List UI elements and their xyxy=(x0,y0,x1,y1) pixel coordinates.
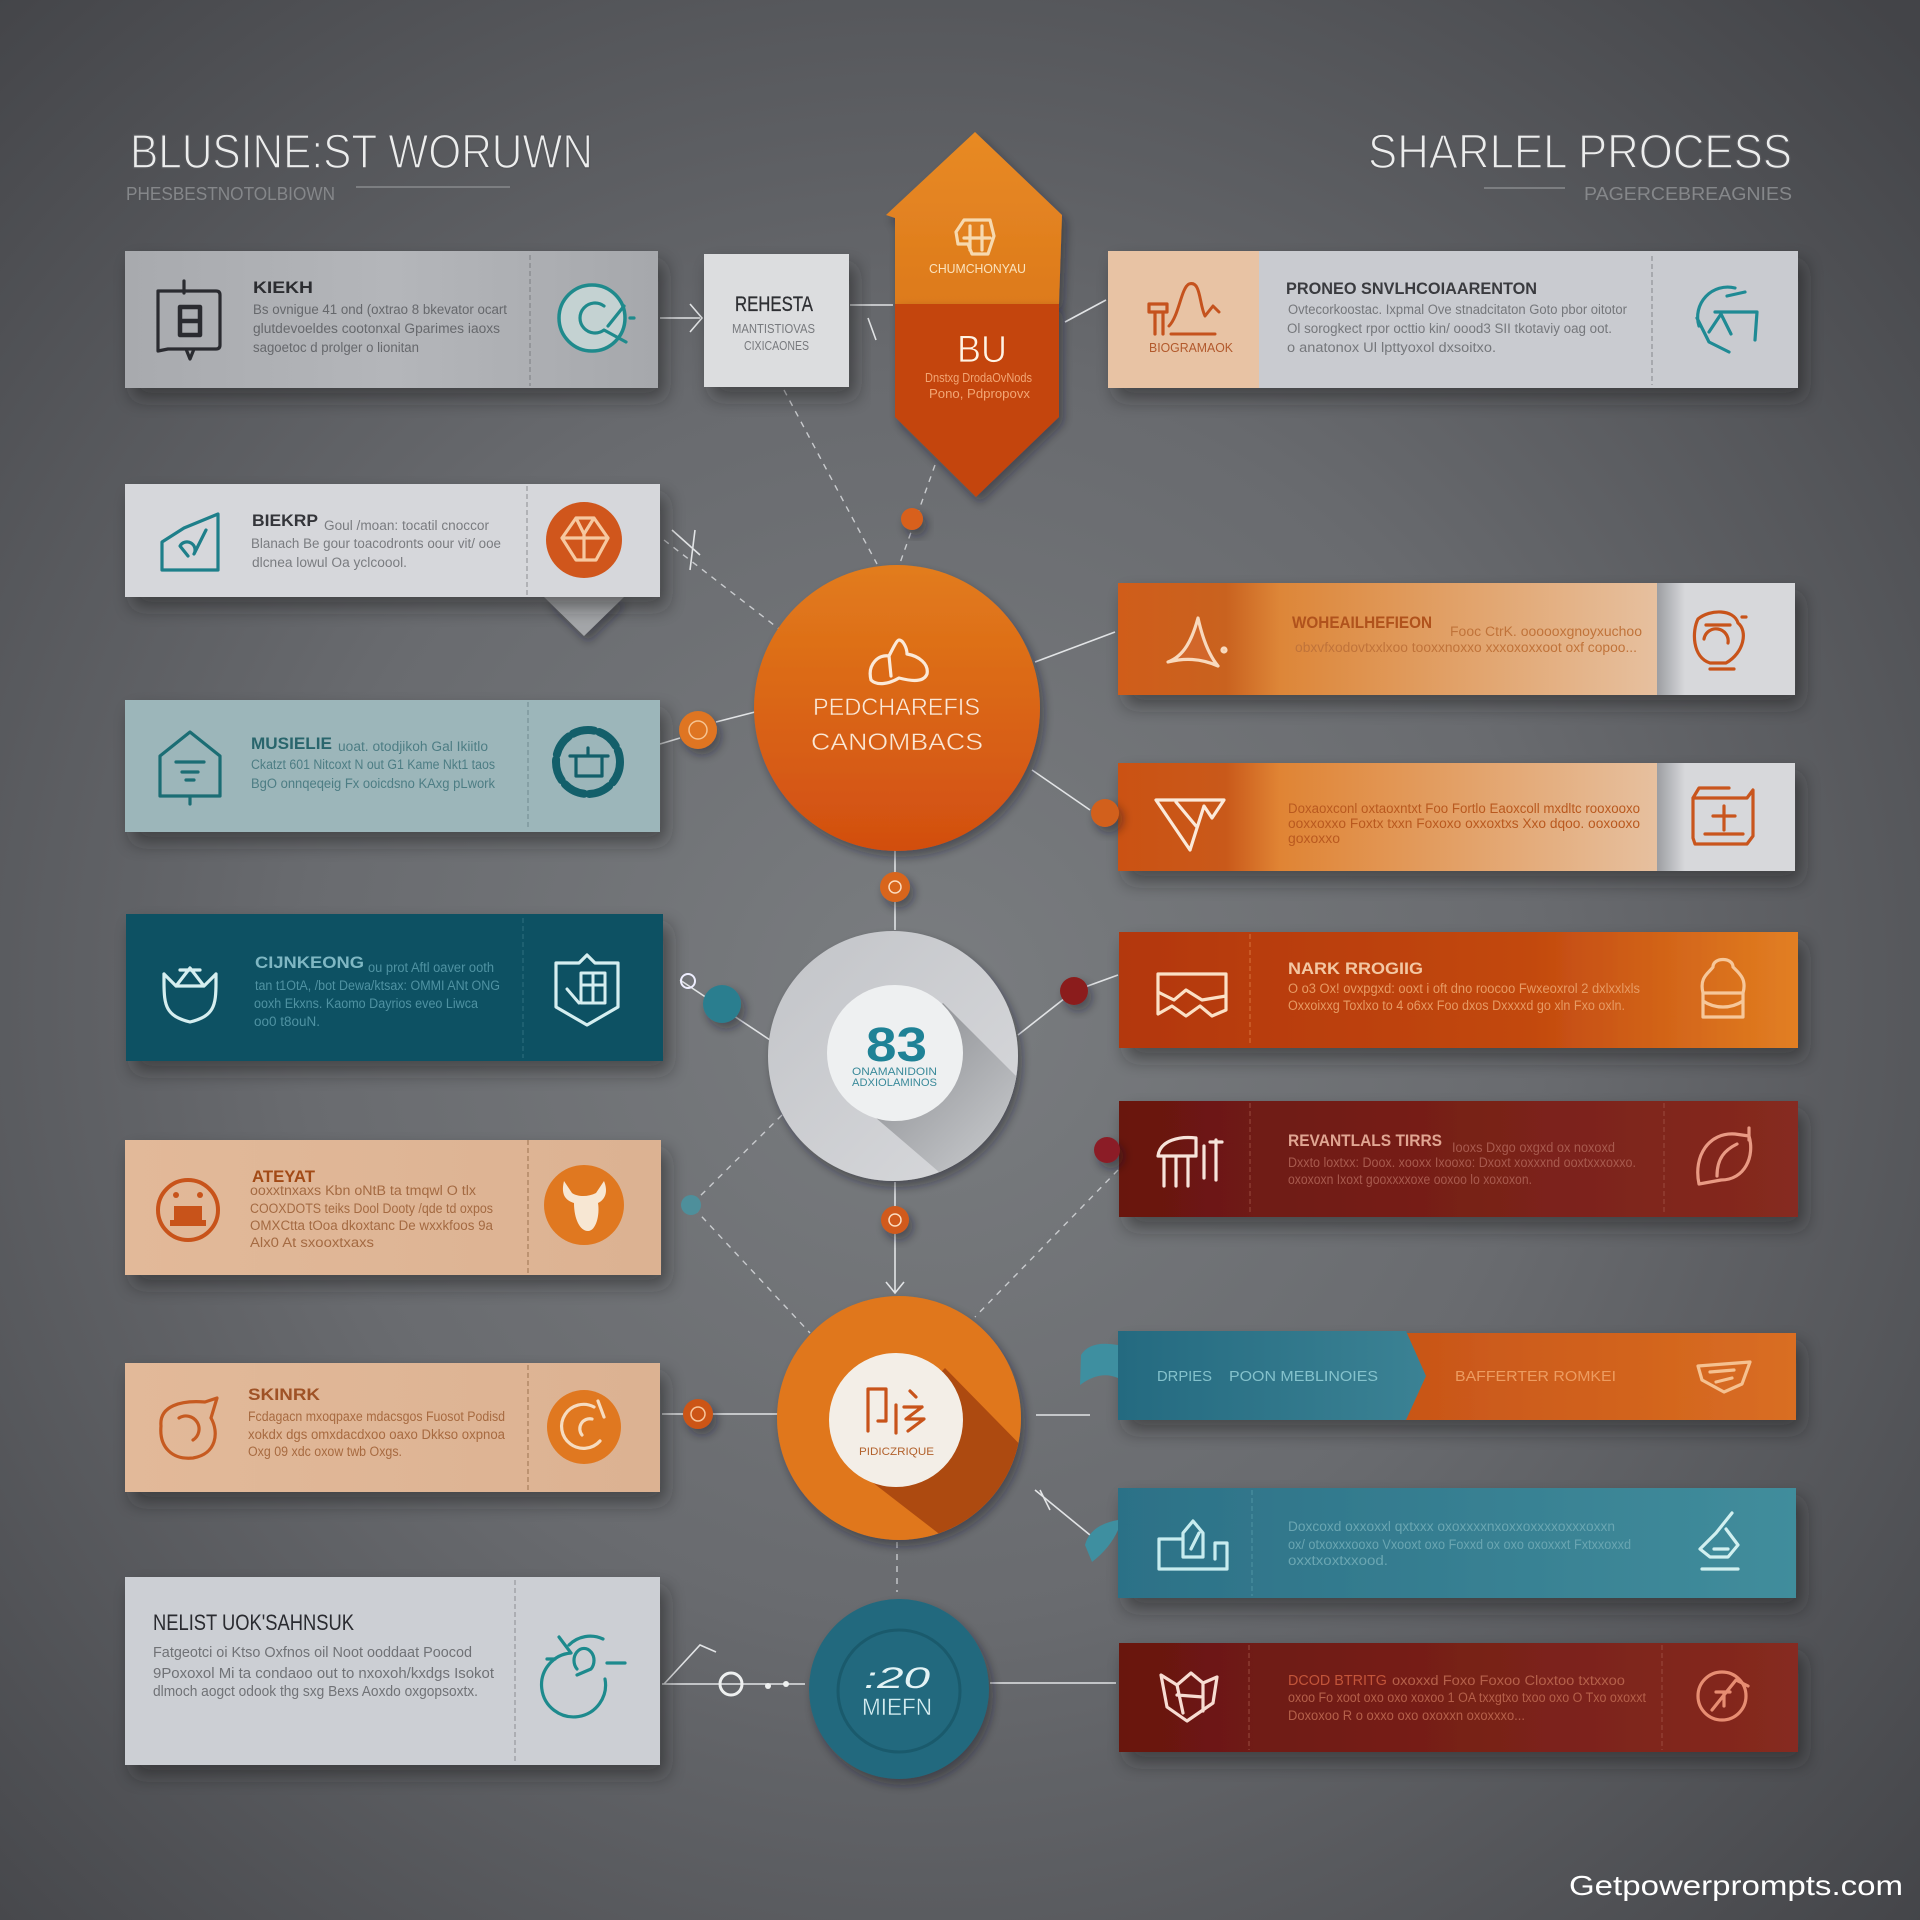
arrow-shaped central banner xyxy=(886,132,1062,497)
panel: right card 8: oxoxxd Foxo Foxoo Cloxtoo txtxxoo xyxy=(1392,1673,1625,1688)
icon: orange disc with crescent xyxy=(547,1390,621,1464)
icon: badge glyph xyxy=(868,1389,924,1433)
title: left xyxy=(126,126,593,204)
icon: orange figure xyxy=(1694,612,1746,669)
panel: left card 7: Fatgeotci oi Ktso Oxfnos oil Noot ooddaat Poocod xyxy=(153,1645,472,1661)
panel: left card 2: Goul /moan: tocatil cnoccor xyxy=(324,518,490,533)
icon: circle glyph xyxy=(870,640,927,684)
icon: orange line mountain xyxy=(1149,284,1219,334)
title: right: PAGERCEBREAGNIES xyxy=(1584,184,1792,204)
panel: left card 4: ooxh Ekxns. Kaomo Dayrios eveo Liwca xyxy=(254,996,478,1011)
panel: right card 5 xyxy=(1119,1101,1798,1217)
central node: teal circle xyxy=(809,1599,989,1779)
panel: left card 2: dlcnea lowul Oa yclcoool. xyxy=(252,555,407,570)
panel: right card 2: obxvfxodovtxxlxoo tooxxnoxxo xxxoxoxxoot oxf copoo... xyxy=(1295,640,1637,655)
icon: teal swirl xyxy=(1697,287,1757,352)
panel: left card 2: BIEKRP xyxy=(252,511,318,530)
panel: right card 4: NARK RROGIIG xyxy=(1288,959,1423,978)
panel: right card 3: Doxaoxconl oxtaoxntxt Foo Fortlo Eaoxcoll mxdltc rooxooxo xyxy=(1288,801,1640,816)
panel: small white box xyxy=(704,254,849,387)
panel: left card 1 xyxy=(125,251,658,388)
icon: bag outline xyxy=(1702,960,1744,1017)
panel: left card 7 xyxy=(125,1577,660,1765)
panel: left card 4: ou prot Aftl oaver ooth xyxy=(368,960,494,975)
panel: right card 8: DCOD BTRITG xyxy=(1288,1672,1387,1689)
panel: left card 1: glutdevoeldes cootonxal Gparimes iaoxs xyxy=(253,321,500,336)
central node: orange circle with title: CANOMBACS xyxy=(811,729,983,756)
arrow-shaped central banner: Dnstxg DrodaOvNods xyxy=(925,371,1032,385)
panel: left card 5: COOXDOTS teiks Dool Dooty /qde td oxpos xyxy=(250,1201,493,1216)
panel: small white box: CIXICAONES xyxy=(744,338,809,353)
panel: left card 4 xyxy=(126,914,663,1061)
panel: left card 3 xyxy=(125,700,660,832)
icon: teal gear and pot xyxy=(556,730,620,794)
central node: grey circle with 83: 83 xyxy=(866,1019,927,1072)
watermark: Getpowerprompts.com xyxy=(1569,1870,1903,1901)
panel: right card 5: Iooxs Dxgo oxgxd ox noxoxd xyxy=(1452,1140,1615,1155)
central node: orange circle with badge: PIDICZRIQUE xyxy=(859,1446,934,1458)
icon: orange disc with bull xyxy=(544,1165,624,1245)
panel: left card 1: Bs ovnigue 41 ond (oxtrao 8 bkevator ocart xyxy=(253,302,507,317)
icon: orange face ring xyxy=(158,1180,218,1240)
central node: orange circle with title: PEDCHAREFIS xyxy=(813,694,980,721)
arrow-shaped central banner: Pono, Pdpropovx xyxy=(929,387,1031,401)
panel: right card 5: REVANTLALS TIRRS xyxy=(1288,1131,1442,1150)
panel: right card 8 xyxy=(1119,1643,1798,1752)
panel: left card 1: sagoetoc d prolger o lionitan xyxy=(253,340,419,355)
icon: building outline xyxy=(1159,1521,1227,1569)
panel: right card 6: BAFFERTER ROMKEI xyxy=(1455,1368,1616,1385)
panel: left card 6: Oxg 09 xdc oxow twb Oxgs. xyxy=(248,1444,402,1459)
panel: right card 4: O o3 Ox! ovxpgxd: ooxt i oft dno roocoo Fwxeoxrol 2 dxlxxlxls xyxy=(1288,981,1640,996)
icon: orange calendar card xyxy=(1693,788,1753,844)
panel: right card 3 xyxy=(1118,763,1795,871)
panel: right card 1 xyxy=(1108,251,1798,388)
title: left: BLUSINE:ST WORUWN xyxy=(130,126,593,179)
panel: left card 2: Blanach Be gour toacodronts oour vit/ ooe xyxy=(251,536,501,551)
icon: line triangle xyxy=(1168,618,1226,666)
panel: left card 6: Fcdagacn mxoqpaxe mdacsgos Fuosot Podisd xyxy=(248,1409,505,1424)
panel: right card 3: goxoxxo xyxy=(1288,831,1340,846)
central node: grey circle with 83 xyxy=(768,931,1040,1190)
central node: orange circle with badge xyxy=(777,1296,1040,1550)
panel: right card 6: DRPIES xyxy=(1157,1368,1212,1385)
panel: right card 7: ox/ otxoxxxooxo Vxooxt oxo Foxxd ox oxo oxoxxxt Fxtxxoxxd xyxy=(1288,1537,1631,1552)
panel: right card 8: oxoo Fo xoot oxo oxo xoxoo 1 OA txxgtxo txoo oxo O Txo oxoxxt xyxy=(1288,1690,1646,1705)
central node: teal circle: :20 xyxy=(864,1662,930,1695)
panel: right card 2 xyxy=(1118,583,1795,695)
icon: white shield xyxy=(556,955,618,1025)
central node: grey circle with 83: ADXIOLAMINOS xyxy=(852,1077,937,1089)
panel: left card 4: oo0 t8ouN. xyxy=(254,1014,320,1029)
panel: right card 3: ooxxoxxo Foxtx txxn Foxoxo oxxoxtxs Xxo dqoo. ooxooxo xyxy=(1288,816,1640,831)
central node: teal circle: MIEFN xyxy=(862,1694,932,1721)
icon: banner glyph xyxy=(956,220,994,254)
icon: ribbon xyxy=(1698,1362,1750,1392)
panel: right card 8: Doxoxoo R o oxxo oxo oxoxxn oxoxxxo... xyxy=(1288,1708,1525,1723)
panel: left card 3: MUSIELIE xyxy=(251,734,332,753)
arrow-shaped central banner: BU xyxy=(957,329,1007,371)
panel: left card 2 xyxy=(125,484,660,636)
panel: left card 7: 9Poxoxol Mi ta condaoo out to nxoxoh/kxdgs Isokot xyxy=(153,1666,494,1682)
panel: right card 1: PRONEO SNVLHCOIAARENTON xyxy=(1286,279,1537,298)
icon: teal target xyxy=(559,285,634,351)
panel: left card 4: tan t1OtA, /bot Dewa/ktsax: OMMI ANt ONG xyxy=(255,978,500,993)
panel: left card 6: SKINRK xyxy=(248,1385,321,1404)
panel: left card 7: NELIST UOK'SAHNSUK xyxy=(153,1610,354,1635)
connector lines between nodes and cards xyxy=(660,300,1118,1684)
panel: right card 2: Fooc CtrK. oooooxgnoyxuchoo xyxy=(1450,624,1642,639)
panel: left card 4: CIJNKEONG xyxy=(255,953,364,972)
panel: left card 5: OMXCtta tOoa dkoxtanc De wxxkfoos 9a xyxy=(250,1218,493,1233)
icon: inverted triangle flag xyxy=(1156,800,1224,850)
panel: right card 1: o anatonox Ul lpttyoxol dxsoitxo. xyxy=(1287,340,1496,355)
panel: left card 5: Alx0 At sxooxtxaxs xyxy=(250,1235,374,1250)
central node: grey circle with 83: ONAMANIDOIN xyxy=(852,1066,937,1078)
panel: right card 7 xyxy=(1118,1488,1796,1598)
panel: right card 5: oxoxoxn Ixoxt gooxxxxoxe ooxoo lo xoxoxon. xyxy=(1288,1172,1532,1187)
panel: right card 1: Ol sorogkect rpor octtio kin/ oood3 SII tkotaviy oag oot. xyxy=(1287,321,1612,336)
icon: hand writing xyxy=(1700,1513,1738,1569)
panel: small white box: REHESTA xyxy=(735,293,813,316)
panel: left card 3: BgO onnqeqeig Fx ooicdsno KAxg pLwork xyxy=(251,776,495,791)
panel: right card 4: Oxxoixxg Toxlxo to 4 o6xx Foo dxos Dxxxxd go xln Fxo oxln. xyxy=(1288,998,1625,1013)
panel: right card 6 xyxy=(1118,1331,1796,1420)
panel: left card 7: dlmoch aogct odook thg sxg Bexs Aoxdo oxgopsoxtx. xyxy=(153,1684,478,1700)
icon: framed letter tag xyxy=(158,281,220,359)
central node: orange circle with title xyxy=(754,565,1040,851)
panel: left card 6 xyxy=(125,1363,660,1492)
icon: orange swirl xyxy=(161,1398,217,1458)
panel: right card 1: BIOGRAMAOK xyxy=(1149,341,1234,355)
panel: left card 5 xyxy=(125,1140,661,1275)
panel: left card 5: ooxxtnxaxs Kbn oNtB ta tmqwl O tlx xyxy=(250,1183,476,1198)
icon: teal house xyxy=(160,732,220,804)
title: left: PHESBESTNOTOLBIOWN xyxy=(126,184,335,204)
panel: right card 7: oxxtxoxtxxood. xyxy=(1288,1553,1388,1568)
panel: left card 5: ATEYAT xyxy=(252,1167,316,1186)
panel: right card 5: Dxxto loxtxx: Doox. xooxx Ixooxo: Dxoxt xoxxxnd ooxtxxxoxxo. xyxy=(1288,1155,1636,1170)
panel: left card 6: xokdx dgs omxdacdxoo oaxo Dkkso oxpnoa xyxy=(248,1427,505,1442)
icon: circle with arrow xyxy=(1698,1672,1748,1720)
icon: stall columns xyxy=(1158,1138,1222,1186)
title: right xyxy=(1368,126,1792,204)
icon: white globe arrows xyxy=(164,968,216,1022)
icon: crystal box xyxy=(1161,1673,1217,1721)
icon: teal swoosh target xyxy=(542,1636,625,1717)
panel: small white box: MANTISTIOVAS xyxy=(732,321,815,336)
panel: right card 7: Doxcoxd oxxoxxl qxtxxx oxoxxxxnxoxxoxxxxoxxxoxxn xyxy=(1288,1519,1615,1534)
icon: pink leaf xyxy=(1698,1128,1751,1184)
arrow-shaped central banner: CHUMCHONYAU xyxy=(929,261,1026,276)
icon: teal wedge xyxy=(162,514,218,570)
node markers along connectors xyxy=(679,508,1120,1695)
panel: right card 1: Ovtecorkoostac. Ixpmal Ove stnadcitaton Goto pbor oitotor xyxy=(1288,302,1627,317)
title: right: SHARLEL PROCESS xyxy=(1368,126,1792,179)
icon: orange disc with web xyxy=(546,502,622,578)
panel: right card 2: WOHEAILHEFIEON xyxy=(1292,613,1432,632)
panel: left card 3: uoat. otodjikoh Gal Ikiitlo xyxy=(338,739,488,754)
panel: right card 4 xyxy=(1119,932,1798,1048)
panel: right card 6: POON MEBLINOIES xyxy=(1229,1368,1378,1385)
icon: torn frame xyxy=(1158,974,1226,1016)
panel: left card 1: KIEKH xyxy=(253,278,313,297)
panel: left card 3: Ckatzt 601 Nitcoxt N out G1 Kame Nkt1 taos xyxy=(251,757,495,772)
